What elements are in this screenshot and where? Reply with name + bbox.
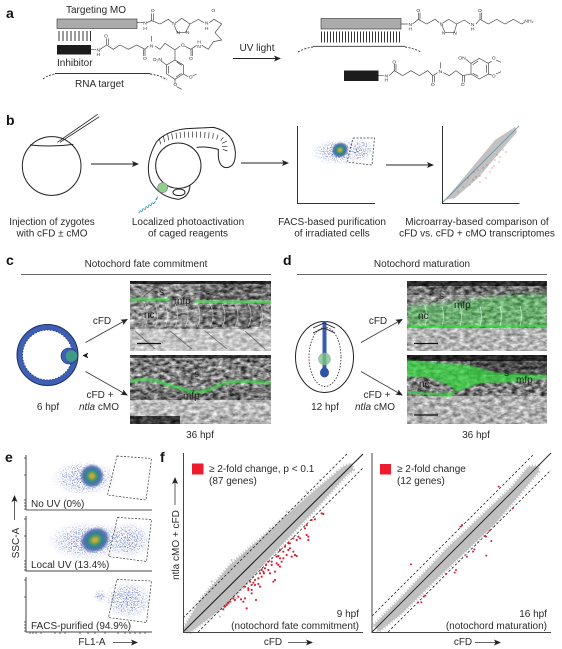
label c: c (6, 252, 14, 268)
arrow to cFD image (361, 320, 402, 342)
baseline (26, 509, 152, 511)
product chemical structures: O (492, 73, 496, 79)
x axis title left: cFD (264, 637, 282, 648)
y axis arrow (14, 496, 16, 520)
caged linker chemical structure: N (150, 43, 154, 49)
stage note: 16 hpf (519, 609, 547, 620)
legend swatch (192, 464, 204, 474)
arrowhead pointer (83, 353, 88, 358)
density core (80, 464, 104, 488)
axes (25, 455, 27, 510)
arrow line (233, 58, 280, 60)
notochord cell walls (425, 306, 522, 326)
axes (26, 577, 152, 632)
inhibitor bar (57, 45, 91, 54)
caged linker chemical structure (91, 8, 222, 89)
product chemical structures: O (392, 59, 396, 65)
diagonal identity line (372, 453, 551, 632)
label: Local UV (13.4%) (31, 560, 109, 571)
caged linker chemical structure: O₂N (153, 57, 162, 63)
product chemical structures: N (385, 74, 389, 80)
heading: Targeting MO: Targeting MO (66, 5, 126, 16)
caged linker chemical structure: O (173, 82, 177, 88)
y axis title: ntla cMO + cFD (171, 510, 182, 580)
released MO bar (321, 18, 401, 29)
product chemical structures: H (385, 78, 389, 84)
legend (192, 464, 315, 487)
legend text: ≥ 2-fold change, p < 0.1 (209, 464, 314, 475)
legend text: (12 genes) (397, 476, 445, 487)
product chemical structures: O (478, 8, 482, 14)
FACS gate (347, 138, 374, 165)
heading rule d (297, 274, 547, 276)
tailbud (320, 368, 329, 378)
panel b: experimental workflow (6, 112, 555, 240)
caged linker chemical structure: N (186, 30, 190, 36)
label: No UV (0%) (31, 499, 84, 510)
icon: embryo with localized photoactivation (139, 127, 235, 213)
product chemical structures: N (439, 69, 443, 75)
stage note: 9 hpf (337, 609, 359, 620)
product chemical structures: N (453, 30, 457, 36)
label f: f (160, 449, 165, 465)
heading d: Notochord maturation (374, 259, 470, 270)
FACS density core (328, 139, 352, 161)
caged linker chemical structure: N (143, 21, 147, 27)
image label nc: nc (144, 310, 155, 321)
diagonal identity line (183, 454, 363, 632)
cFD + ntla cMO label: ntla cMO (355, 402, 395, 413)
micrograph: c cMO (130, 355, 271, 424)
product chemical structures: H (471, 27, 475, 33)
plot: FACS-purified (24, 577, 153, 634)
irradiated region (66, 350, 77, 362)
caged linker chemical structure: H (205, 26, 209, 32)
red dots: changed genes (411, 487, 513, 602)
arrow to cMO image (361, 372, 402, 395)
arrow 2 (241, 162, 288, 164)
MO-RNA base pairing ticks (321, 32, 402, 42)
image label nc: nc (419, 379, 430, 390)
green ventral line (130, 326, 271, 328)
36 hpf label right: 36 hpf (462, 430, 490, 441)
product chemical structures: N (440, 22, 444, 28)
tissue texture (130, 281, 271, 351)
red dots (458, 150, 506, 192)
dashed upper bound (183, 453, 348, 618)
product chemical structures: NH₂ (524, 19, 534, 25)
x axis arrow right (475, 642, 500, 644)
scale bar (414, 342, 438, 344)
x axis arrow (113, 642, 137, 644)
image label mfp: mfp (183, 391, 200, 402)
caged linker chemical structure: H (143, 26, 147, 32)
chorion oval (296, 322, 354, 392)
panel a: caged morpholino and UV uncaging (6, 5, 534, 90)
irradiated region (318, 353, 330, 365)
caged linker chemical structure: N (177, 30, 181, 36)
released inhibitor bar (344, 70, 378, 81)
caption: photoactivation: Localized photoactivation (132, 217, 244, 228)
arrow 3 (386, 164, 433, 166)
heading c: Notochord fate commitment (85, 259, 208, 270)
cFD + ntla cMO label: cFD + (87, 390, 113, 401)
green somite glow (407, 294, 547, 326)
dark oblique septa (135, 284, 265, 349)
stage note: (notochord maturation) (446, 621, 547, 632)
axes (184, 453, 363, 632)
axes (442, 126, 520, 204)
gate (108, 456, 152, 500)
red dots: significant genes (223, 513, 323, 609)
notochord cell walls (145, 304, 262, 327)
gate (108, 580, 152, 622)
cFD label: cFD (93, 316, 111, 327)
legend text: (87 genes) (209, 476, 257, 487)
axes (372, 453, 551, 632)
image label mfp: mfp (454, 300, 471, 311)
image label mfp: mfp (516, 375, 533, 386)
base pairing ticks (59, 31, 90, 41)
FACS axes (298, 126, 375, 204)
sparse events (50, 460, 118, 496)
caged linker chemical structure: N (197, 44, 201, 50)
micrograph: d cMO (407, 355, 547, 424)
RNA target strand (43, 74, 167, 80)
arrow to cFD image (86, 320, 127, 342)
micrograph: c cFD (130, 281, 271, 351)
blastoderm ring (17, 324, 78, 386)
uncaged products schematic (298, 8, 534, 88)
6 hpf label: 6 hpf (37, 402, 59, 413)
label a: a (6, 5, 14, 21)
product chemical structures: N (471, 22, 475, 28)
caged linker chemical structure: O (143, 56, 147, 62)
stage note: (notochord fate commitment) (231, 621, 359, 632)
caged linker chemical structure: H (197, 39, 201, 45)
chevrons (313, 323, 335, 333)
label e: e (5, 449, 13, 465)
product chemical structures: O (416, 8, 420, 14)
UV light text: UV light (239, 43, 275, 54)
cFD label: cFD (369, 316, 387, 327)
tissue texture (407, 281, 547, 351)
product chemical structures: ON (458, 55, 466, 61)
x axis title: FL1-A (78, 637, 106, 648)
gray gene cloud (184, 463, 353, 632)
caged linker chemical structure: N (97, 47, 101, 53)
green tissue patch (407, 360, 547, 397)
arrow: UV light (233, 43, 280, 58)
image label s: s (504, 368, 509, 379)
panel d: notochord maturation (283, 252, 547, 424)
axes (26, 516, 152, 571)
product chemical structures: H (409, 27, 413, 33)
FACS scatter speckles (310, 138, 375, 165)
FACS plot (298, 126, 375, 204)
RNA strand (298, 46, 421, 52)
outlier gray dots (212, 472, 337, 617)
product chemical structures: O (461, 82, 465, 88)
y axis arrow (174, 478, 176, 505)
icon: zygote injection (22, 114, 99, 195)
arrow to cMO image (86, 372, 127, 395)
y axis title: SSC-A (11, 527, 22, 558)
x ticks (30, 632, 145, 634)
label: FACS-purified (94.9%) (31, 621, 131, 632)
y ticks (24, 519, 26, 570)
diagonal (442, 126, 519, 203)
dashed lower bound (388, 470, 551, 632)
label b: b (6, 112, 15, 128)
product chemical structures (378, 8, 534, 88)
targeting MO bar (57, 19, 137, 28)
caption: injection: Injection of zygotes (9, 217, 95, 228)
scale bar (137, 342, 161, 344)
plot: 16 hpf (372, 453, 551, 632)
caged reagent schematic (43, 5, 222, 90)
caged linker chemical structure: O (104, 33, 108, 39)
density core (75, 521, 115, 559)
36 hpf label left: 36 hpf (186, 430, 214, 441)
x axis title right: cFD (454, 637, 472, 648)
neural axis (322, 321, 326, 370)
caged linker chemical structure: O (189, 56, 193, 62)
caged linker chemical structure: O (181, 43, 185, 49)
gate (108, 518, 152, 562)
green floor plate (130, 300, 271, 302)
legend (380, 464, 466, 487)
dashed lower bound (198, 468, 363, 632)
cFD + ntla cMO label: cFD + (364, 390, 390, 401)
caption: microarray: Microarray-based comparison of (405, 217, 549, 228)
plot: No UV (24, 455, 152, 510)
legend swatch (380, 464, 391, 474)
image label s: s (439, 291, 444, 302)
heading rule c (21, 274, 271, 276)
caption: FACS: FACS-based purification (278, 217, 386, 228)
gate events (103, 580, 153, 620)
shield (61, 348, 77, 364)
gray gene cloud (374, 466, 539, 632)
panel c: notochord fate commitment (6, 252, 271, 424)
x axis arrow left (288, 642, 312, 644)
y ticks (24, 580, 26, 631)
y ticks (24, 458, 26, 509)
gray gene cloud (445, 127, 517, 200)
caged linker chemical structure: H (97, 52, 101, 58)
caged linker chemical structure: O (211, 8, 215, 14)
caged linker chemical structure: O (151, 8, 155, 14)
12 hpf label: 12 hpf (311, 402, 339, 413)
caption: photoactivation: of caged reagents (148, 228, 228, 240)
image label s: s (194, 369, 199, 380)
plot: 9 hpf (183, 453, 363, 632)
tissue texture (407, 355, 547, 424)
inhibitor text: Inhibitor (57, 58, 93, 69)
product chemical structures: N (442, 30, 446, 36)
arrow 1 (91, 163, 138, 165)
microarray plot (442, 126, 520, 204)
dashed upper bound (372, 454, 534, 616)
caged linker chemical structure: N (205, 21, 209, 27)
caption: injection: with cFD ± cMO (15, 228, 88, 240)
caged linker chemical structure: O (189, 75, 193, 81)
product chemical structures: N (409, 22, 413, 28)
image label mfp: mfp (174, 296, 191, 307)
sparse events (46, 521, 130, 561)
green wavy floor plate (130, 380, 271, 392)
cFD + ntla cMO label: ntla cMO (79, 402, 119, 413)
yolk dotted edge (22, 330, 72, 380)
tissue texture (130, 355, 271, 424)
scale bar (414, 414, 438, 416)
product chemical structures: O (431, 82, 435, 88)
label d: d (283, 252, 292, 268)
caption: FACS: of irradiated cells (294, 228, 370, 240)
labels: s (159, 287, 164, 298)
panel f: microarray plots (160, 449, 551, 648)
icon: 6 hpf embryo (17, 324, 78, 386)
caption: microarray: cFD vs. cFD + cMO transcriptomes (399, 228, 555, 240)
panel e: FACS plots (5, 449, 153, 648)
dashed embryo outline (309, 328, 341, 386)
product chemical structures: O (492, 55, 496, 61)
image label nc: nc (418, 311, 429, 322)
green ventral line (407, 326, 547, 327)
yolk (22, 330, 72, 380)
micrograph: d cFD (407, 281, 547, 351)
plot: Local UV (24, 516, 152, 571)
caged linker chemical structure: N (172, 21, 176, 27)
icon: 12 hpf embryo (296, 321, 354, 392)
RNA target text: RNA target (75, 79, 124, 90)
stray events (93, 589, 107, 603)
gate events (104, 521, 152, 559)
legend text: ≥ 2-fold change (397, 464, 466, 475)
